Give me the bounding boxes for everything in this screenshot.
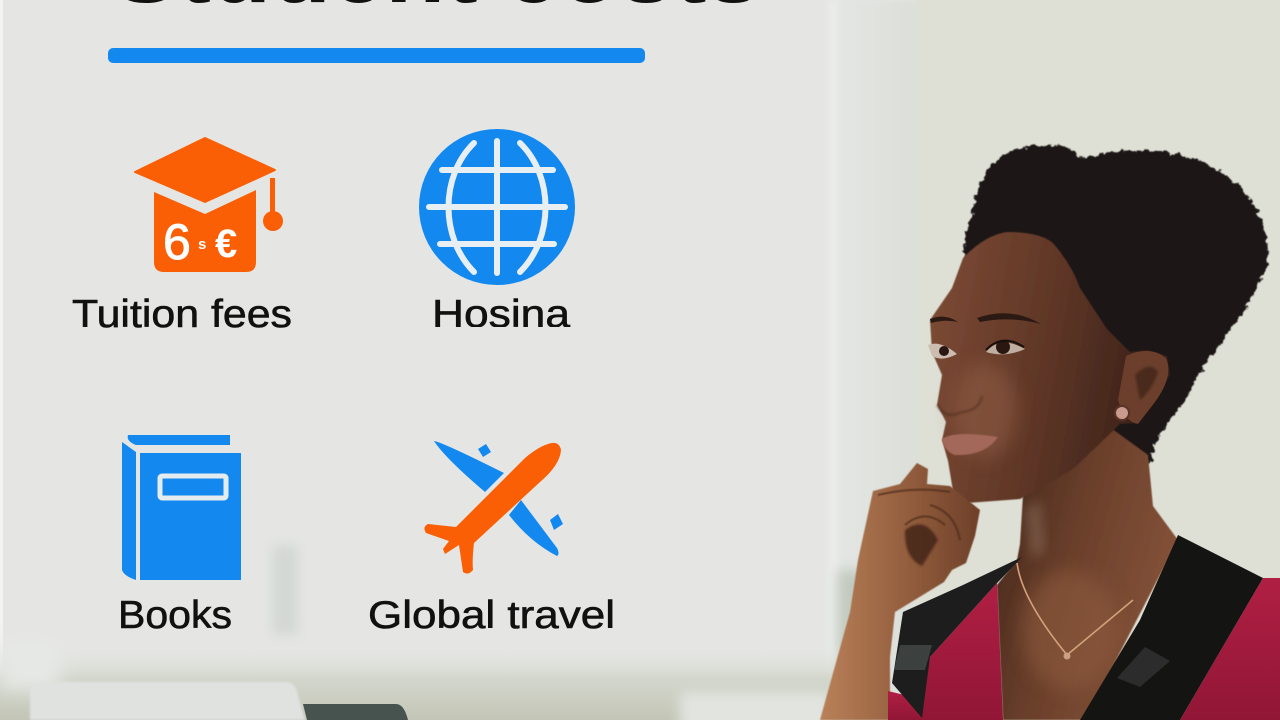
cost item: books <box>118 435 241 637</box>
finger lines <box>878 490 960 540</box>
backpack strap left <box>892 557 1022 718</box>
neck highlight <box>1026 500 1044 558</box>
strap patch right <box>1117 647 1170 687</box>
backpack strap right <box>1080 535 1263 720</box>
red top <box>888 578 1280 720</box>
icon: graduation cap with price: s <box>198 236 206 253</box>
chest tone <box>1022 570 1118 690</box>
earring <box>1115 406 1129 420</box>
cost item: housing <box>419 129 575 336</box>
label: global travel: Global travel <box>368 594 615 637</box>
label: tuition fees: Tuition fees <box>72 293 292 336</box>
necklace <box>1017 563 1133 660</box>
photo: student looking up <box>820 145 1280 720</box>
cost item: global travel <box>368 441 615 637</box>
eyes <box>928 340 1025 359</box>
ear shadow <box>1135 367 1158 400</box>
icon: graduation cap with price: 6 <box>163 214 191 270</box>
hair <box>963 145 1268 465</box>
icon: airplane <box>424 441 563 574</box>
nose shadow <box>937 396 982 415</box>
cost item: tuition fees <box>72 138 292 336</box>
label: housing (cropped wording): Hosina <box>432 293 570 336</box>
icon: blue globe <box>419 129 575 285</box>
ear <box>1118 351 1168 424</box>
title underline <box>108 48 645 63</box>
eyebrows <box>930 313 1041 324</box>
face <box>930 232 1170 503</box>
arm and hand <box>820 463 980 720</box>
icon: blue book <box>122 435 241 580</box>
backpack strap patch left <box>894 645 932 670</box>
laptop in the foreground <box>30 682 408 720</box>
icon: graduation cap with price <box>135 138 283 272</box>
label: books: Books <box>118 594 232 637</box>
icon: graduation cap with price: € <box>215 222 237 266</box>
neck and chest <box>997 420 1178 720</box>
lips <box>942 434 998 455</box>
cheek highlight <box>953 362 1017 458</box>
